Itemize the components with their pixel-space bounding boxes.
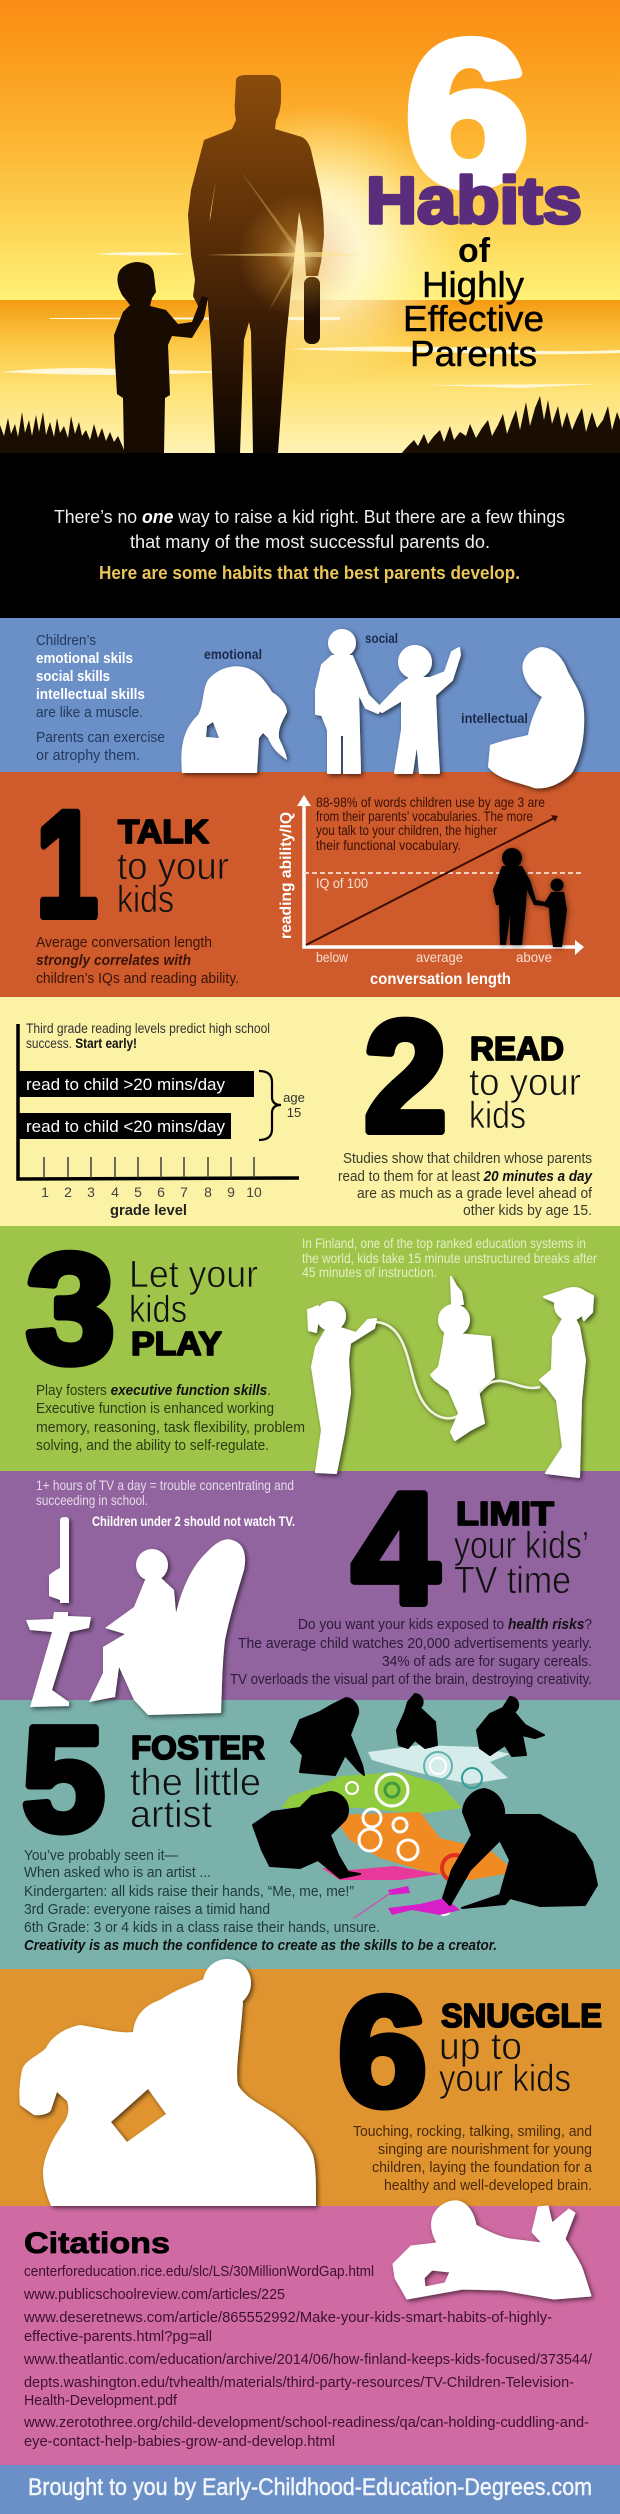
habit 5 text: You’ve probably seen it— [24, 1847, 178, 1864]
citations list: effective-parents.html?pg=all [24, 2329, 212, 2345]
habit 2 text: Studies show that children whose parents [343, 1150, 592, 1167]
bar: under 20 minutes: read to child <20 mins/day [26, 1117, 225, 1136]
habit 4 heading [352, 1461, 589, 1637]
heading TALK: TALK [118, 813, 209, 850]
heading kids: kids [129, 1289, 187, 1331]
citations list: centerforeducation.rice.edu/slc/LS/30MillionWordGap.html [24, 2264, 374, 2280]
habit 1 text: Average conversation length [36, 934, 212, 951]
chart note: success. Start early! [26, 1035, 137, 1051]
chart note [26, 1020, 270, 1051]
citations list: eye-contact-help-babies-grow-and-develop.html [24, 2434, 335, 2450]
axis numbers: 4 [111, 1184, 119, 1200]
heading artist: artist [130, 1794, 212, 1836]
intro text [54, 507, 565, 583]
habit 3 text [36, 1382, 305, 1454]
habit 5 text: Creativity is as much the confidence to create as the skills to be a creator. [24, 1937, 497, 1954]
habit 2 text: read to them for at least 20 minutes a day [338, 1168, 593, 1185]
x axis categories: below [316, 949, 349, 965]
icon: children drawing silhouettes [253, 1694, 597, 1908]
axis numbers: 7 [180, 1184, 188, 1200]
skill labels: intellectual [461, 710, 528, 726]
icon: intellectual child silhouette [488, 647, 584, 788]
habit 4 text: 34% of ads are for sugary cereals. [382, 1653, 592, 1670]
illustration: chalk drawing [281, 1745, 516, 1918]
panel: footer background [0, 2465, 620, 2514]
habit 5 text: 3rd Grade: everyone raises a timid hand [24, 1901, 270, 1918]
habit 3 text: solving, and the ability to self-regulate. [36, 1437, 269, 1454]
habit 3 text: memory, reasoning, task flexibility, problem [36, 1419, 305, 1436]
girl holding rope right [540, 1288, 593, 1477]
skill labels [204, 630, 528, 726]
title [366, 0, 582, 374]
habit 6 text: healthy and well-developed brain. [384, 2177, 592, 2194]
chart note: Third grade reading levels predict high school [26, 1020, 270, 1036]
age label: age [283, 1090, 305, 1105]
title word Highly: Highly [422, 264, 524, 305]
title word Parents: Parents [410, 333, 537, 374]
citations list: www.deseretnews.com/article/865552992/Make-your-kids-smart-habits-of-highly- [23, 2310, 552, 2326]
habit 2 text: other kids by age 15. [463, 1202, 592, 1219]
axis numbers: 9 [227, 1184, 235, 1200]
axis numbers: 10 [246, 1184, 262, 1200]
x axis label: conversation length [370, 971, 511, 988]
tv monitor [49, 1517, 69, 1603]
citations heading: Citations [24, 2227, 170, 2260]
note highlight: Children under 2 should not watch TV. [92, 1513, 295, 1529]
child jumping [431, 1277, 494, 1440]
number 3: 3 [26, 1222, 115, 1395]
habit 6 text: children, laying the foundation for a [372, 2159, 593, 2176]
x axis label: grade level [110, 1202, 187, 1219]
chart note: their functional vocabulary. [316, 837, 461, 853]
habit 1 text: strongly correlates with [36, 952, 191, 969]
panel: play background [0, 1226, 620, 1471]
armchair [130, 1539, 245, 1715]
x axis categories: average [416, 949, 463, 965]
citations list [23, 2264, 593, 2450]
axis numbers [41, 1184, 262, 1200]
axis numbers: 6 [157, 1184, 165, 1200]
heading LIMIT: LIMIT [456, 1495, 554, 1532]
icon: child watching TV [26, 1517, 245, 1715]
heading the little: the little [130, 1762, 261, 1804]
title word Effective: Effective [403, 298, 544, 339]
habit 3 heading [26, 1222, 258, 1395]
bar: over 20 minutes: read to child >20 mins/day [26, 1075, 225, 1094]
habit 5 text: Kindergarten: all kids raise their hands, “Me, me, me!” [24, 1883, 354, 1900]
icon: child lying down reading [393, 2201, 591, 2299]
chart note [316, 794, 545, 853]
intro text: that many of the most successful parents do. [130, 532, 490, 552]
heading kids: kids [469, 1095, 526, 1137]
axis numbers: 1 [41, 1184, 49, 1200]
heading FOSTER: FOSTER [131, 1729, 265, 1766]
chart note: 88-98% of words children use by age 3 are [316, 794, 545, 810]
age label [283, 1090, 305, 1120]
skills text block: Parents can exercise [36, 729, 165, 746]
skills text block [36, 632, 165, 764]
line chart: conversation length vs reading ability [278, 794, 584, 988]
icon: kids jumping rope [308, 1277, 593, 1477]
habit 4 note [36, 1477, 295, 1529]
panel: artist background [0, 1700, 620, 1969]
heading READ: READ [470, 1030, 564, 1067]
heading TV time: TV time [454, 1560, 571, 1602]
habit 4 note: 1+ hours of TV a day = trouble concentrating and [36, 1477, 294, 1493]
number 6: 6 [338, 1965, 427, 2138]
number 1: 1 [36, 780, 98, 948]
number 2: 2 [364, 989, 447, 1165]
icon: grass right [400, 396, 620, 455]
bar chart: grade level by reading time [18, 1020, 305, 1219]
brace [259, 1071, 281, 1140]
citations list: Health-Development.pdf [24, 2393, 178, 2409]
citations list: www.theatlantic.com/education/archive/2014/06/how-finland-keeps-kids-focused/373544/ [23, 2352, 593, 2368]
child top right [477, 1697, 544, 1756]
skills text block: or atrophy them. [36, 747, 140, 764]
tv table [26, 1612, 91, 1707]
habit 4 text [230, 1616, 592, 1688]
panel: citations background [0, 2206, 620, 2465]
citations list: depts.washington.edu/tvhealth/materials/third-party-resources/TV-Children-Television- [24, 2375, 574, 2391]
age label: 15 [287, 1105, 301, 1120]
heading SNUGGLE: SNUGGLE [441, 1997, 602, 2034]
skills text block: intellectual skills [36, 686, 145, 703]
habit 6 heading [338, 1965, 602, 2138]
skills text block: are like a muscle. [36, 704, 143, 721]
habit 6 text [353, 2123, 593, 2194]
habit 5 text [24, 1847, 497, 1954]
heading to your: to your [117, 846, 229, 888]
bar: under 20 minutes [18, 1113, 231, 1139]
panel: talk background [0, 772, 620, 997]
habit 4 text: Do you want your kids exposed to health risks? [298, 1616, 592, 1633]
skills text block: emotional skils [36, 650, 133, 667]
title word Habits: Habits [366, 163, 582, 237]
habit 2 text: are as much as a grade level ahead of [357, 1185, 593, 1202]
x axis categories [316, 949, 552, 965]
habit 3 text: Play fosters executive function skills. [36, 1382, 271, 1399]
heading Let your: Let your [129, 1254, 258, 1296]
habit 5 text: When asked who is an artist ... [24, 1864, 211, 1881]
panel: snuggle background [0, 1969, 620, 2206]
skill labels: social [365, 630, 398, 646]
icon: mother and child snuggling [19, 1959, 316, 2206]
panel: read background [0, 997, 620, 1226]
heading up to: up to [439, 2026, 522, 2068]
heading PLAY: PLAY [131, 1325, 222, 1362]
icon: child silhouette [114, 262, 208, 453]
habit 5 text: 6th Grade: 3 or 4 kids in a class raise their hands, unsure. [24, 1919, 380, 1936]
chart note: you talk to your children, the higher [316, 822, 497, 838]
habit 5 heading [22, 1697, 265, 1862]
habit 6 text: singing are nourishment for young [378, 2141, 592, 2158]
habit 1 text [36, 934, 239, 987]
child lower right [443, 1789, 597, 1908]
skill labels: emotional [204, 646, 262, 662]
chart note: from their parents’ vocabularies. The more [316, 808, 533, 824]
title word of: of [458, 232, 491, 270]
habit 4 note: succeeding in school. [36, 1492, 148, 1508]
panel: skills background [0, 618, 620, 772]
Finland note [302, 1235, 597, 1280]
heading your kids: your kids [439, 2058, 571, 2100]
habit 1 text: children’s IQs and reading ability. [36, 970, 239, 987]
panel: hero sunset [0, 0, 620, 618]
y axis label: reading ability/IQ [278, 812, 295, 939]
habit 2 heading [364, 989, 581, 1165]
icon: emotional child silhouette [181, 666, 287, 773]
heading kids: kids [117, 879, 174, 921]
icon: social children silhouettes [316, 630, 460, 773]
habit 1 heading [36, 780, 229, 948]
panel: tv background [0, 1471, 620, 1700]
habit 6 text: Touching, rocking, talking, smiling, and [353, 2123, 592, 2140]
heading your kids: your kids’ [454, 1525, 589, 1567]
icon: grass left [0, 412, 126, 455]
seated child [89, 1549, 178, 1702]
child top middle [397, 1694, 437, 1748]
habit 4 text: The average child watches 20,000 advertisements yearly. [238, 1635, 592, 1652]
axis ticks [44, 1157, 254, 1178]
x axis categories: above [516, 949, 552, 965]
icon: parent and child [493, 848, 567, 947]
number 5: 5 [22, 1697, 105, 1862]
icon: carried bottle bag [304, 277, 320, 344]
jump rope [374, 1322, 540, 1418]
child lower left [253, 1792, 360, 1878]
habit 2 text [338, 1150, 593, 1219]
axis numbers: 5 [134, 1184, 142, 1200]
skills text block: Children’s [36, 632, 96, 649]
intro text: There’s no one way to raise a kid right. But there are a few things [54, 507, 565, 527]
axis numbers: 2 [64, 1184, 72, 1200]
skills text block: social skills [36, 668, 110, 685]
IQ label: IQ of 100 [316, 875, 368, 891]
axis numbers: 3 [87, 1184, 95, 1200]
title numeral 6: 6 [405, 0, 529, 228]
intro highlight: Here are some habits that the best parents develop. [99, 563, 520, 583]
axis numbers: 8 [204, 1184, 212, 1200]
number 4: 4 [352, 1461, 439, 1637]
Finland note: 45 minutes of instruction. [302, 1264, 437, 1280]
citations list: www.publicschoolreview.com/articles/225 [23, 2287, 285, 2303]
girl holding rope left [308, 1302, 376, 1473]
citations list: www.zerotothree.org/child-development/school-readiness/qa/can-holding-cuddling-and- [23, 2415, 589, 2431]
habit 3 text: Executive function is enhanced working [36, 1400, 274, 1417]
child top left [291, 1698, 364, 1775]
icon: sun flare [205, 170, 362, 317]
bar: over 20 minutes [18, 1071, 254, 1097]
heading to your: to your [469, 1062, 581, 1104]
icon: father silhouette [188, 75, 324, 453]
